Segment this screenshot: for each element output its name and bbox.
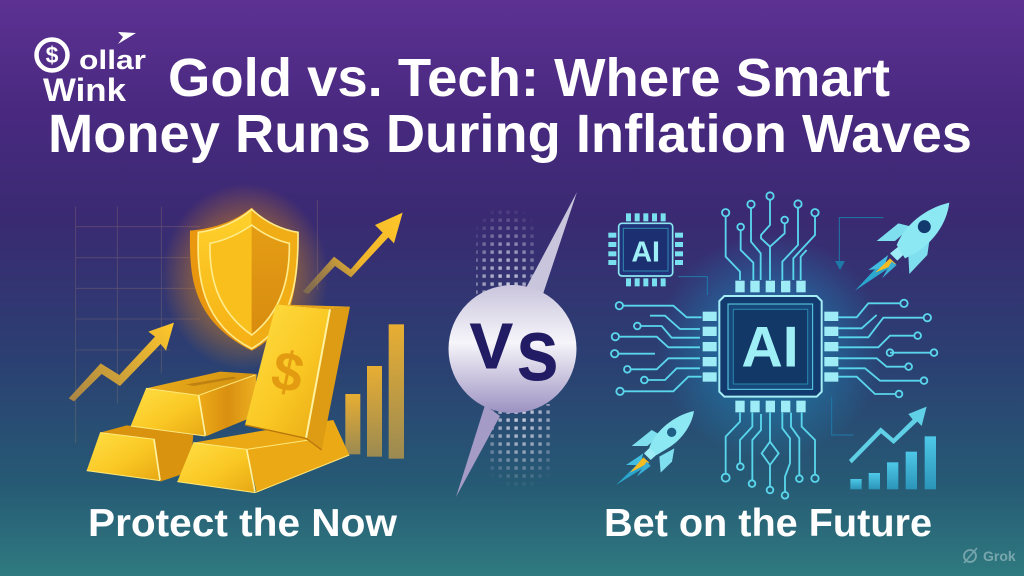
Vs text: V (470, 310, 513, 382)
chip pins (703, 281, 838, 412)
gold bar: top stacked (131, 372, 257, 436)
gold bar: bottom right (177, 420, 349, 493)
lightning spike (526, 192, 577, 297)
logo accent arrow (118, 32, 136, 44)
caption: tech side: Bet on the Future (604, 502, 932, 545)
vs badge (448, 192, 577, 497)
chip label: AI (741, 316, 799, 380)
icon: shield (190, 208, 298, 351)
faint connector lines (678, 218, 883, 435)
bar chart (345, 324, 404, 459)
arrow: upper rising (303, 213, 403, 294)
logo wordmark: Wink: Wink (43, 72, 126, 108)
logo icon: dollar ring: $ (46, 42, 59, 68)
gold bar: bottom left (87, 425, 193, 482)
small AI chip (608, 213, 683, 286)
circuit traces (611, 192, 937, 499)
logo wordmark: ollar: ollar (79, 45, 147, 75)
small AI chip: AI (631, 236, 660, 268)
watermark: Grok: Grok (983, 548, 1016, 564)
chip glow (657, 233, 883, 460)
title (48, 48, 972, 164)
caption: gold side: Protect the Now (88, 502, 398, 545)
title line 1: Gold vs. Tech: Where Smart (168, 48, 890, 108)
dollar sign: $ (266, 338, 309, 405)
icon: rocket upper (855, 203, 949, 291)
growth chart (849, 407, 936, 489)
dot texture (476, 198, 552, 494)
panel: gold illustration (69, 183, 404, 493)
watermark: Grok (964, 548, 1016, 564)
gold bar: leaning with dollar sign (245, 304, 350, 450)
icon: rocket lower (616, 411, 694, 485)
chart grid (76, 200, 317, 443)
badge circle (448, 285, 576, 413)
shield glow (162, 183, 328, 370)
panel: AI illustration (608, 192, 949, 499)
arrow: lower rising (69, 323, 174, 401)
main AI chip (719, 296, 822, 397)
bars (850, 436, 936, 489)
title line 2: Money Runs During Inflation Waves (48, 104, 972, 164)
trend arrow (849, 407, 927, 463)
logo: Dollar Wink (36, 32, 147, 108)
vs badge: s (516, 300, 559, 399)
